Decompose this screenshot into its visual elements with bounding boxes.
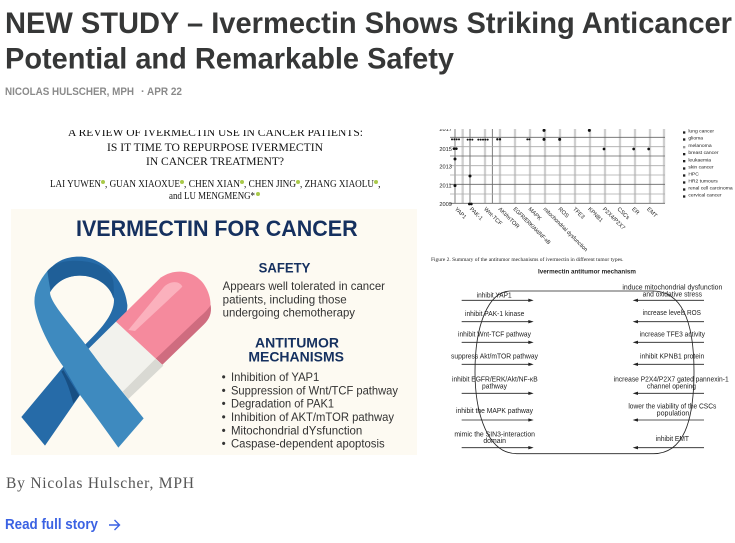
mechanisms list: • [222, 424, 226, 437]
right mechanism labels: and oxidative stress [643, 291, 702, 298]
chart year axis [439, 127, 452, 208]
title: NEW STUDY – Ivermectin Shows Striking Anticancer [5, 7, 733, 40]
mechanisms list: Mitochondrial dYsfunction [231, 424, 362, 437]
safety text: Appears well tolerated in cancer [223, 280, 385, 293]
left mechanism labels [451, 292, 538, 445]
left mechanism labels: inhibit EGFR/ERK/Akt/NF-κB [452, 377, 538, 384]
chart legend: glioma [688, 136, 703, 142]
figure caption: Figure 2. Summary of the antitumor mechanisms of ivermectin in different tumor types. [431, 256, 624, 263]
infographic heading: IVERMECTIN FOR CANCER [76, 216, 358, 241]
antitumor mechanisms heading: MECHANISMS [248, 350, 344, 365]
left arrows [462, 299, 534, 449]
chart year axis: 2017 [439, 127, 452, 133]
paper title and authors: , GUAN XIAOXUE [105, 179, 180, 190]
mechanisms list: • [222, 398, 226, 411]
icon: awareness ribbon back band [21, 257, 127, 446]
mechanisms list [222, 371, 398, 451]
mechanisms list: • [222, 371, 226, 384]
chart legend: HPC [688, 171, 699, 177]
author line: By Nicolas Hulscher, MPH [6, 475, 194, 492]
paper title and authors: IS IT TIME TO REPURPOSE IVERMECTIN [107, 140, 323, 154]
right mechanism labels: increase TFE3 activity [640, 332, 705, 339]
antitumor mechanisms heading: ANTITUMOR [255, 335, 339, 350]
panel: ivermectin for cancer infographic [11, 209, 417, 455]
central cell outline [475, 291, 694, 454]
chart year axis: 2015 [439, 147, 452, 153]
chart mechanism labels: P2X4/P2X7 [601, 207, 626, 231]
left mechanism labels: inhibit Wnt-TCF pathway [458, 332, 531, 339]
chart mechanism labels: PAK-1 [468, 207, 483, 222]
safety text [223, 280, 385, 320]
right mechanism labels: inhibit EMT [656, 436, 690, 443]
paper title and authors: , CHEN XIAN [184, 179, 240, 190]
icon: ribbon loop shading [47, 261, 114, 298]
left mechanism labels: inhibit the MAPK pathway [456, 408, 533, 415]
right mechanism labels: induce mitochondrial dysfunction [622, 285, 722, 292]
chart mechanism labels: ROS [557, 207, 570, 220]
chart legend: skin cancer [688, 164, 714, 170]
left mechanism labels: inhibit YAP1 [477, 292, 512, 299]
icon: awareness ribbon front band [34, 271, 144, 448]
chart mechanism labels: EGFR/ERK/Akt/NF-κB [512, 207, 551, 246]
chart mechanism labels: TFE3 [571, 207, 585, 221]
paper title and authors: , [378, 179, 381, 190]
safety heading: SAFETY [259, 261, 310, 276]
chart mechanism labels: YAP1 [453, 207, 467, 221]
paper title and authors: and LU MENGMENG* [169, 191, 255, 202]
chart mechanism labels: CSCs [616, 207, 630, 221]
right arrows [633, 299, 704, 449]
chart mechanism labels: Wnt-TCF [482, 207, 503, 227]
mechanisms list: • [222, 411, 226, 424]
chart legend: leukaemia [688, 157, 711, 163]
left mechanism labels: suppress Akt/mTOR pathway [451, 353, 538, 360]
chart legend: lung cancer [688, 129, 714, 135]
icon: capsule [88, 272, 211, 399]
right mechanism labels: increase levels ROS [643, 310, 701, 317]
mechanisms list: • [222, 384, 226, 397]
mechanisms list: Inhibition of AKT/mTOR pathway [231, 411, 394, 424]
left mechanism labels: domain [483, 438, 506, 445]
right mechanism labels: channel opening [647, 383, 696, 390]
chart year axis: 2009 [439, 202, 452, 208]
chart legend: breast cancer [688, 150, 719, 156]
title: Potential and Remarkable Safety [5, 42, 455, 76]
right mechanism labels: increase P2X4/P2X7 gated pannexin-1 [614, 377, 729, 384]
byline and date: · [141, 86, 145, 98]
chart mechanism labels: ER [630, 207, 640, 216]
paper title and authors: A REVIEW OF IVERMECTIN USE IN CANCER PATIENTS: [68, 125, 363, 139]
mechanisms list: Caspase-dependent apoptosis [231, 438, 385, 451]
right mechanism labels: lower the viability of the CSCs [628, 404, 717, 411]
left mechanism labels: inhibit PAK-1 kinase [465, 311, 524, 318]
chart: antitumor mechanisms by tumor type [439, 127, 733, 253]
icon: ribbon crossing shadow [61, 370, 79, 403]
mechanisms list: • [222, 438, 226, 451]
right mechanism labels: inhibit KPNB1 protein [640, 353, 704, 360]
left mechanism labels: mimic the SIN3-interaction [454, 431, 535, 438]
diagram heading: Ivermectin antitumor mechanism [538, 269, 636, 276]
mechanisms list: Degradation of PAK1 [231, 398, 334, 411]
chart legend: renal cell carcinoma [688, 185, 733, 191]
paper title and authors: , ZHANG XIAOLU [300, 179, 374, 190]
chart mechanism labels: AKt/mTOR [497, 207, 520, 230]
chart legend [683, 129, 733, 198]
paper title and authors: , CHEN JING [244, 179, 296, 190]
byline and date: APR 22 [147, 86, 182, 98]
safety text: patients, including those [223, 293, 347, 306]
safety text: undergoing chemotherapy [223, 307, 355, 320]
chart legend: melanoma [688, 143, 712, 149]
right mechanism labels: population [657, 410, 689, 417]
chart mechanism labels [453, 207, 658, 253]
antitumor mechanisms heading [248, 335, 344, 365]
chart year axis: 2013 [439, 165, 452, 171]
diagram: ivermectin antitumor mechanism [451, 269, 729, 454]
title [5, 7, 733, 76]
chart year axis: 2011 [439, 183, 452, 189]
right mechanism labels [614, 285, 729, 443]
mechanisms list: Suppression of Wnt/TCF pathway [231, 384, 398, 397]
chart mechanism labels: EMT [645, 207, 658, 220]
chart legend: cervical cancer [688, 192, 722, 198]
paper title and authors: LAI YUWEN [50, 179, 101, 190]
paper title and authors [50, 130, 380, 199]
chart mechanism labels: KPNB1 [586, 207, 604, 224]
read full story link: Read full story [5, 517, 98, 533]
mechanisms list: Inhibition of YAP1 [231, 371, 319, 384]
icon: arrow [109, 520, 120, 530]
chart mechanism labels: mitochondrial dysfunction [542, 207, 588, 253]
paper title and authors: IN CANCER TREATMENT? [146, 154, 284, 168]
chart data points [451, 129, 650, 205]
byline and date: NICOLAS HULSCHER, MPH [5, 86, 134, 98]
left mechanism labels: pathway [482, 383, 507, 390]
chart legend: HR2 tumours [688, 178, 718, 184]
chart mechanism labels: MAPK [527, 207, 542, 222]
